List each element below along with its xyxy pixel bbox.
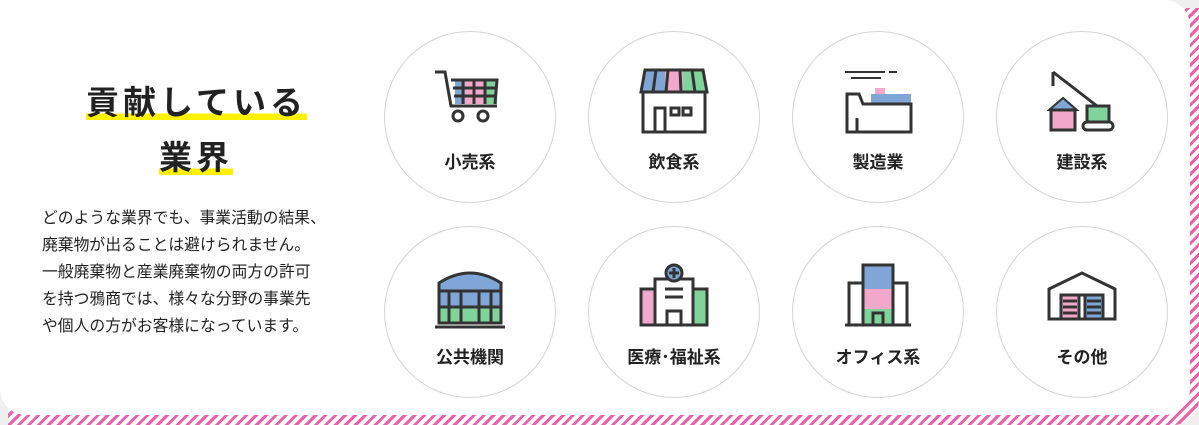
text block: や個人の方がお客様になっています。	[42, 318, 308, 335]
text block: 廃棄物が出ることは避けられません。	[42, 237, 310, 254]
title line 2: 業界	[159, 139, 233, 176]
circle: food: 飲食系	[648, 153, 700, 172]
circle: public: 公共機関	[436, 348, 504, 367]
circle: retail	[384, 31, 556, 203]
title: 貢献している	[86, 84, 307, 121]
circle: other	[996, 226, 1168, 398]
text block: 一般廃棄物と産業廃棄物の両方の許可	[42, 264, 311, 281]
circle: manufacturing	[792, 31, 964, 203]
circle: office: オフィス系	[836, 348, 920, 367]
circle: public	[384, 226, 556, 398]
text block	[42, 209, 326, 335]
circle: retail: 小売系	[444, 153, 496, 172]
circle: other: その他	[1056, 348, 1108, 367]
circle: food	[588, 31, 760, 203]
circle: manufacturing: 製造業	[852, 153, 904, 172]
circle: construction	[996, 31, 1168, 203]
text block: どのような業界でも、事業活動の結果、	[42, 210, 326, 227]
circle: medical: 医療･福祉系	[627, 348, 721, 367]
text block: を持つ鴉商では、様々な分野の事業先	[42, 291, 311, 308]
circle: office	[792, 226, 964, 398]
circle: medical	[588, 226, 760, 398]
circle: construction: 建設系	[1056, 153, 1108, 172]
